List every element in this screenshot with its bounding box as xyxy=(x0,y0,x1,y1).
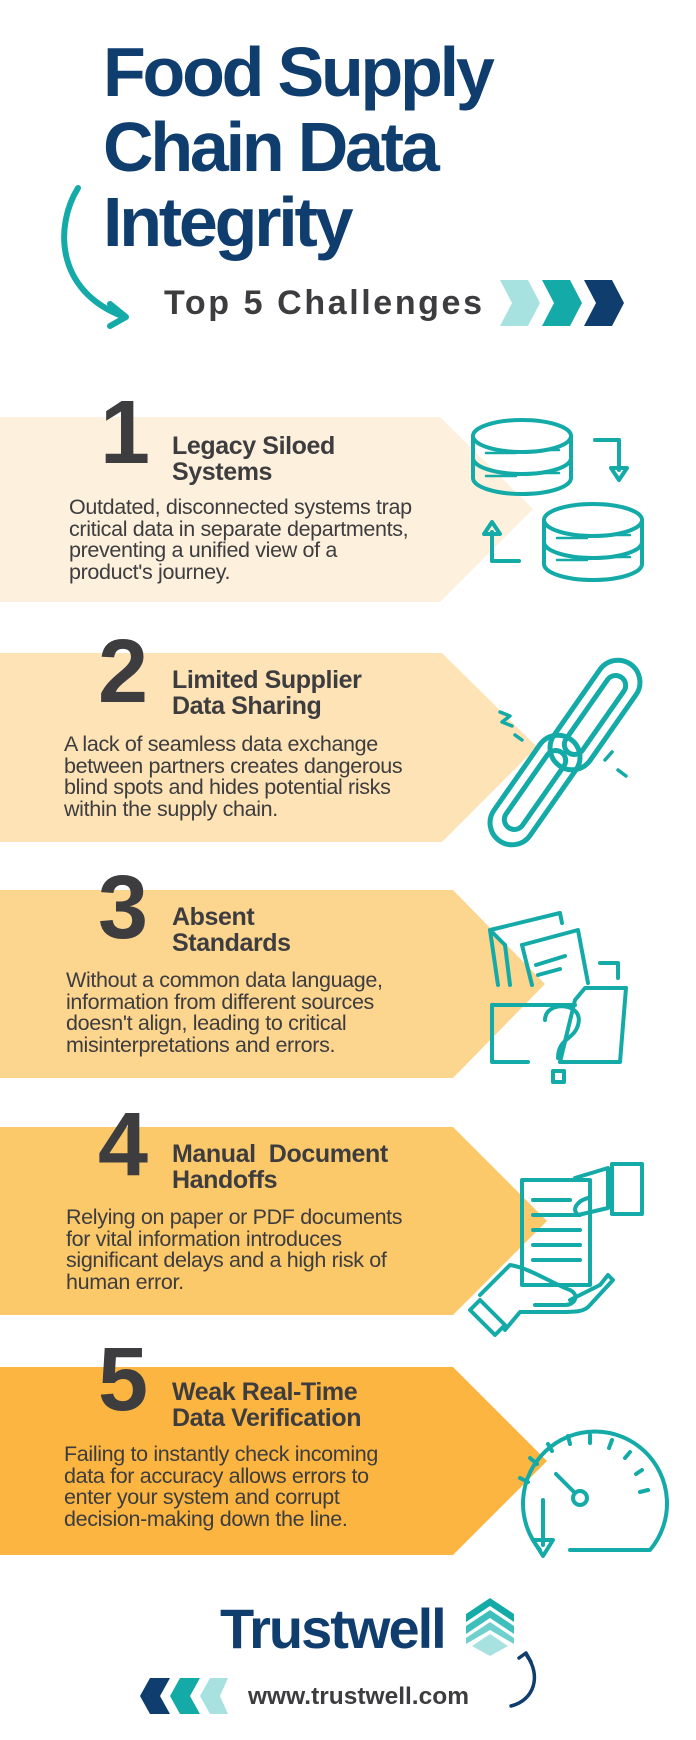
heading 1 xyxy=(172,432,335,486)
body 1: preventing a unified view of a xyxy=(69,538,337,562)
heading 1: Legacy Siloed xyxy=(172,432,335,460)
curved arrow to subtitle xyxy=(61,185,129,329)
title: Integrity xyxy=(103,183,350,261)
heading 4: Manual Document xyxy=(172,1140,388,1168)
panel 5 text xyxy=(64,1330,378,1531)
body 2 xyxy=(64,732,402,821)
body 5: data for accuracy allows errors to xyxy=(64,1464,369,1488)
icon: hand with document xyxy=(470,1164,642,1335)
icon: broken chain xyxy=(481,652,649,853)
body 2: blind spots and hides potential risks xyxy=(64,775,390,799)
heading 4: Handoffs xyxy=(172,1166,277,1194)
body 5: Failing to instantly check incoming xyxy=(64,1442,378,1466)
number 5: 5 xyxy=(98,1330,146,1430)
title: Food Supply xyxy=(103,33,492,111)
number 3: 3 xyxy=(98,858,146,958)
panel 3 text xyxy=(66,858,383,1057)
body 3: doesn't align, leading to critical xyxy=(66,1011,346,1035)
number 2: 2 xyxy=(98,622,146,722)
heading 2: Limited Supplier xyxy=(172,666,361,694)
number 4: 4 xyxy=(98,1095,146,1195)
body 2: within the supply chain. xyxy=(64,797,278,821)
title: Chain Data xyxy=(103,108,437,186)
body 3: information from different sources xyxy=(66,990,374,1014)
panel 2 text xyxy=(64,622,402,821)
panel 2 background xyxy=(0,653,536,842)
body 4 xyxy=(66,1205,402,1294)
website url: www.trustwell.com xyxy=(248,1683,469,1710)
body 2: A lack of seamless data exchange xyxy=(64,732,378,756)
panel 1 background xyxy=(0,417,533,602)
heading 2 xyxy=(172,666,362,720)
body 3: misinterpretations and errors. xyxy=(66,1033,335,1057)
panel 5 background xyxy=(0,1367,547,1555)
panel 1 text xyxy=(69,383,412,584)
heading 5 xyxy=(172,1378,361,1432)
body 2: between partners creates dangerous xyxy=(64,754,402,778)
heading 2: Data Sharing xyxy=(172,692,321,720)
icon: folder with question xyxy=(490,913,626,1082)
heading 1: Systems xyxy=(172,458,272,486)
logo: Trustwell wordmark: Trustwell xyxy=(220,1597,445,1660)
body 5 xyxy=(64,1442,378,1531)
body 3 xyxy=(66,968,383,1057)
heading 4 xyxy=(172,1140,388,1194)
body 4: for vital information introduces xyxy=(66,1227,342,1251)
body 3: Without a common data language, xyxy=(66,968,383,992)
chevrons xyxy=(500,280,624,326)
icon: gauge xyxy=(520,1432,667,1556)
title xyxy=(103,33,494,261)
footer chevrons xyxy=(140,1678,228,1714)
icon: databases xyxy=(473,420,642,580)
subtitle: Top 5 Challenges xyxy=(164,284,485,322)
body 4: human error. xyxy=(66,1270,184,1294)
heading 3: Absent xyxy=(172,903,254,931)
body 1: critical data in separate departments, xyxy=(69,517,408,541)
heading 5: Data Verification xyxy=(172,1404,361,1432)
body 4: significant delays and a high risk of xyxy=(66,1248,386,1272)
panel 4 background xyxy=(0,1127,547,1315)
heading 5: Weak Real-Time xyxy=(172,1378,357,1406)
body 5: enter your system and corrupt xyxy=(64,1485,339,1509)
body 5: decision-making down the line. xyxy=(64,1507,348,1531)
body 1 xyxy=(69,495,412,584)
icon: logo chevron mark xyxy=(466,1598,514,1656)
panel 4 text xyxy=(66,1095,402,1294)
small curved arrow to logo xyxy=(509,1651,536,1708)
heading 3: Standards xyxy=(172,929,291,957)
body 4: Relying on paper or PDF documents xyxy=(66,1205,402,1229)
body 1: product's journey. xyxy=(69,560,230,584)
panel 3 background xyxy=(0,890,545,1078)
heading 3 xyxy=(172,903,291,957)
number 1: 1 xyxy=(100,383,148,483)
body 1: Outdated, disconnected systems trap xyxy=(69,495,412,519)
